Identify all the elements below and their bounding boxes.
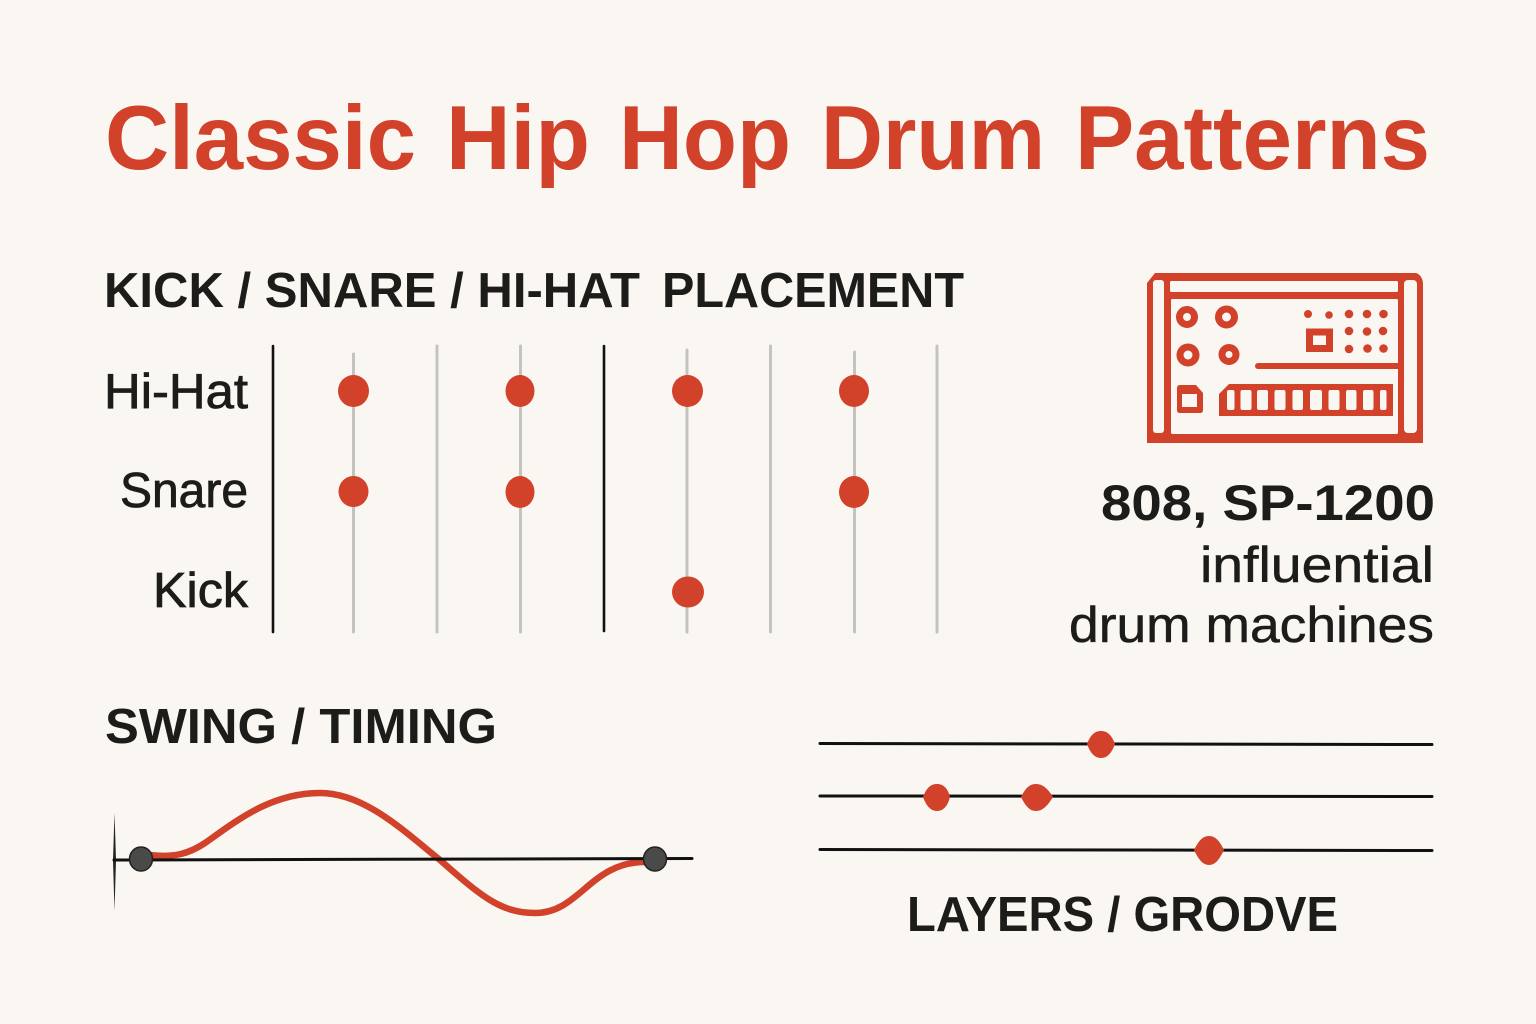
knobs	[1180, 309, 1236, 363]
title: Hip	[446, 88, 590, 189]
track hits	[923, 731, 1224, 865]
chart: swing curve	[113, 793, 692, 913]
pad button	[1177, 385, 1203, 413]
title: Classic	[105, 88, 416, 189]
track lines	[820, 744, 1432, 850]
divider bar	[1258, 363, 1400, 369]
baseline	[114, 858, 692, 860]
text block: drum machines caption	[1069, 475, 1435, 653]
title: Drum	[821, 88, 1045, 189]
small dots	[1304, 310, 1388, 353]
heading: placement: KICK / SNARE / HI-HAT	[104, 264, 640, 318]
heading: layers / groove: LAYERS / GRODVE	[907, 888, 1338, 942]
display square	[1310, 332, 1330, 348]
row labels: Hi-Hat	[104, 365, 248, 419]
step grid lines	[273, 346, 937, 632]
chart: layers groove tracks	[820, 731, 1432, 865]
swing wave	[150, 793, 645, 913]
heading: placement: PLACEMENT	[662, 264, 964, 318]
heading: swing / timing: SWING / TIMING	[105, 700, 497, 754]
title	[105, 88, 1430, 189]
kick hit	[672, 576, 704, 608]
text block: drum machines caption: drum machines	[1069, 597, 1434, 653]
machine casing	[1147, 273, 1423, 443]
start marker	[130, 847, 152, 871]
heading: placement	[104, 264, 964, 318]
snare hits	[338, 476, 869, 508]
timing axis	[113, 813, 116, 911]
title: Patterns	[1075, 88, 1430, 189]
text block: drum machines caption: influential	[1200, 537, 1434, 593]
end marker	[644, 847, 666, 871]
panel: kick / snare / hi-hat placement	[104, 264, 964, 632]
title: Hop	[619, 88, 791, 189]
text block: drum machines caption: 808, SP-1200	[1101, 475, 1435, 531]
hi-hat hits	[338, 375, 869, 407]
row labels	[104, 365, 249, 618]
step key strip	[1219, 384, 1393, 416]
row labels: Snare	[120, 464, 248, 518]
row labels: Kick	[153, 564, 249, 618]
icon: drum machine	[1147, 273, 1423, 443]
